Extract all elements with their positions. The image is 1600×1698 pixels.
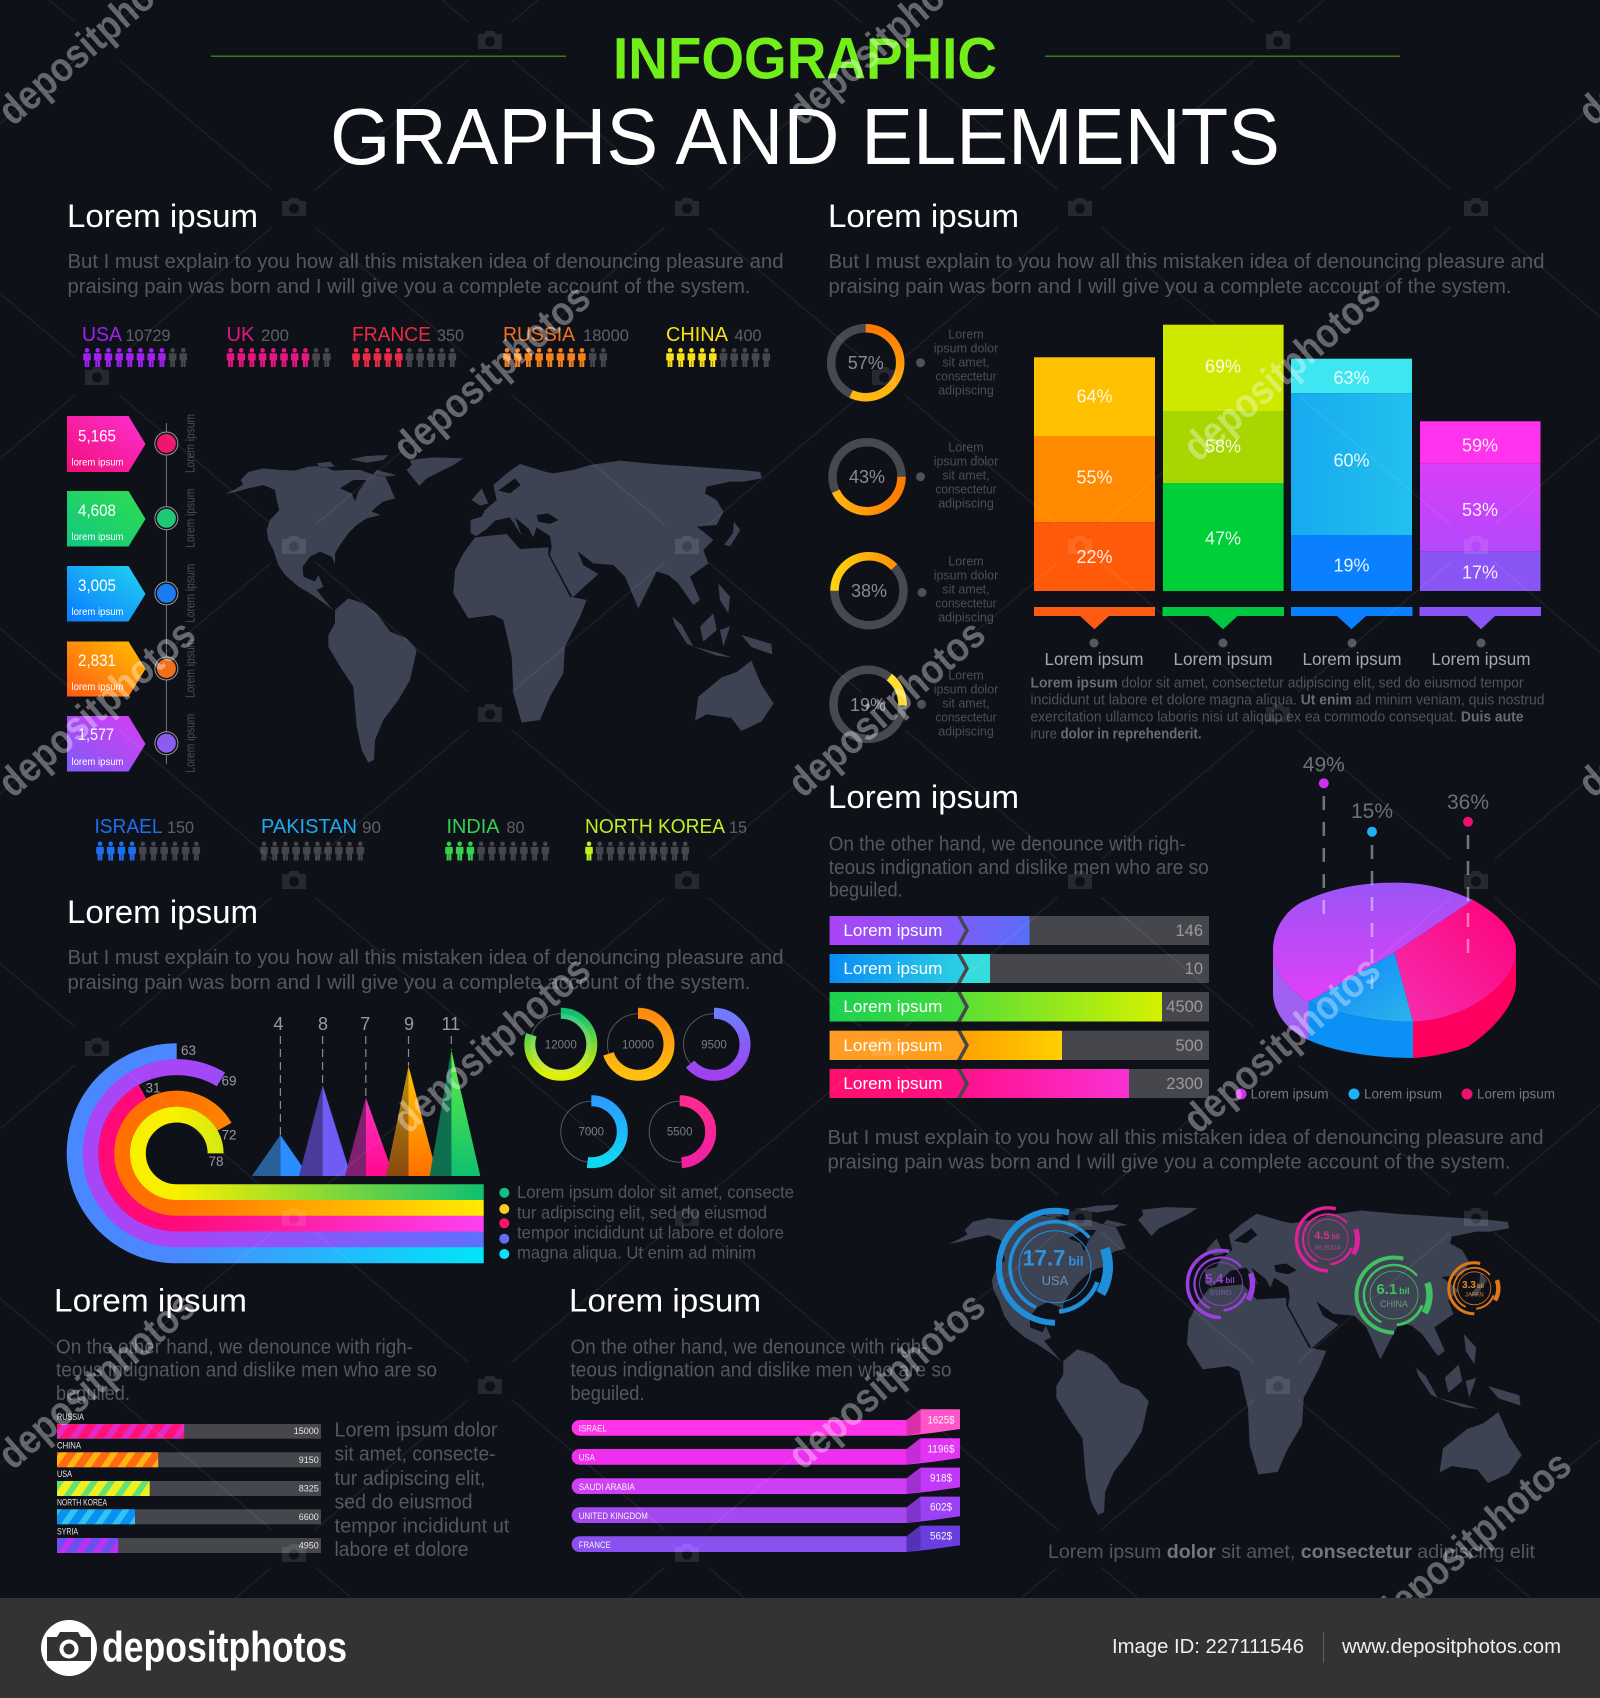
bar: 10: 10	[1185, 960, 1203, 978]
donut text 1: adipiscing	[938, 383, 994, 397]
striped bar: North Korea	[57, 1498, 321, 1524]
tag: 4,608: lorem ipsum	[72, 531, 124, 543]
intro text: On the other hand, we denounce with righ-	[570, 1336, 928, 1358]
rainbow arc chart	[75, 1051, 484, 1255]
donut text 4: consectetur	[936, 710, 996, 724]
country: India	[445, 819, 550, 860]
country: USA: USA	[82, 323, 122, 346]
rainbow labels: 72	[221, 1127, 237, 1142]
footer logo wordmark: depositphotos	[102, 1624, 347, 1672]
ring: Japan 3.3 bil: JAPAN	[1465, 1292, 1484, 1298]
small donut: 12000	[530, 1013, 592, 1075]
triangle dashes and numbers: 11	[441, 1014, 460, 1034]
footer logo icon	[41, 1620, 97, 1676]
tag: 2,831	[67, 639, 198, 698]
ring: Europe 5,4 bil: EURO	[1210, 1288, 1232, 1297]
bar: 500: 500	[1175, 1037, 1203, 1055]
country: Russia: 18000	[583, 326, 629, 345]
title	[211, 26, 1400, 181]
country: China: 400	[734, 326, 762, 345]
pie legend: Lorem ipsum	[1364, 1086, 1442, 1102]
small donut: 10000: 10000	[622, 1039, 654, 1051]
triangle dashes and numbers: 4	[273, 1014, 283, 1034]
watermark cameras	[85, 31, 1488, 1562]
country: Israel	[96, 819, 200, 860]
heading: Lorem ipsum	[828, 779, 1019, 815]
donut: 57%	[831, 328, 925, 397]
stacked bar 3: Lorem ipsum	[1302, 649, 1402, 669]
intro text line 2: teous indignation and dislike men who are so	[570, 1360, 952, 1382]
ring: Russia 4.5 bil	[1290, 1201, 1366, 1277]
stacked bar 2: 58%	[1205, 437, 1241, 457]
striped bar: China	[57, 1441, 321, 1467]
donut text 1: sit amet,	[942, 355, 990, 369]
bar: 500	[830, 1031, 1209, 1060]
country: China	[666, 327, 770, 367]
intro text line 2: praising pain was born and I will give you a complete account of the system.	[68, 972, 750, 994]
intro text line 2: teous indignation and dislike men who are so	[829, 857, 1209, 879]
bar: 4500: Lorem ipsum	[843, 997, 942, 1016]
intro text line 3: beguiled.	[570, 1383, 644, 1405]
country: UK: 200	[261, 326, 289, 345]
tag: 2,831: lorem ipsum	[72, 681, 124, 693]
watermarks: depositphotos	[1174, 274, 1389, 470]
donut: 43%: 43%	[849, 467, 885, 487]
ribbon: USA: 1196$	[928, 1444, 954, 1456]
stacked bar 1: 55%	[1076, 468, 1112, 488]
donut text 3: adipiscing	[938, 611, 994, 625]
footer bar	[0, 1598, 1600, 1698]
country: North Korea	[585, 819, 746, 860]
donut text 3: Lorem	[948, 555, 984, 569]
map caption: Lorem ipsum dolor sit amet, consectetur adipiscing elit	[1048, 1541, 1536, 1563]
tag: 4,608: 4,608	[78, 501, 116, 520]
tag: 3,005: Lorem ipsum	[184, 564, 198, 623]
bar: 146: Lorem ipsum	[843, 921, 942, 940]
bars caption: irure dolor in reprehenderit.	[1030, 726, 1202, 742]
triangle dashes and numbers: 8	[318, 1014, 328, 1034]
rainbow labels: 31	[145, 1081, 161, 1096]
donut text 2	[934, 441, 998, 511]
ring: Europe 5,4 bil: 5,4bil	[1205, 1271, 1235, 1286]
bars caption: exercitation ullamco laboris nisi ut aliquip ex ea commodo consequat. Duis aute	[1030, 709, 1524, 725]
striped bar: Russia: RUSSIA	[57, 1412, 84, 1422]
triangle dashes and numbers: 9	[404, 1014, 414, 1034]
pie callout: 49%: 49%	[1303, 754, 1345, 777]
stacked bar 4: 53%	[1462, 500, 1498, 520]
ribbon: United Kingdom: 602$	[930, 1502, 952, 1514]
striped bar: Syria: 4950	[299, 1540, 319, 1550]
country: Pakistan	[260, 819, 380, 860]
intro text: On the other hand, we denounce with righ-	[56, 1336, 413, 1358]
country: Russia: RUSSIA	[503, 323, 575, 346]
small donut: 12000: 12000	[545, 1039, 577, 1051]
pie legend: Lorem ipsum	[1477, 1086, 1555, 1102]
3D pie chart	[1273, 883, 1516, 1058]
donut text 4: Lorem	[948, 668, 984, 682]
donut: 19%	[820, 656, 926, 753]
stacked bar 4: Lorem ipsum	[1432, 649, 1530, 669]
donut text 2: Lorem	[948, 441, 984, 455]
ribbon: United Kingdom: UNITED KINGDOM	[579, 1511, 648, 1521]
heading: Lorem ipsum	[54, 1282, 247, 1318]
small donut: 9500	[683, 1013, 745, 1075]
donut text 3	[934, 555, 998, 625]
rainbow legend: magna aliqua. Ut enim ad minim	[517, 1243, 756, 1263]
donut: 43%	[832, 442, 925, 511]
watermarks: depositphotos	[779, 1282, 994, 1478]
striped bars side text: Lorem ipsum dolor	[334, 1420, 498, 1442]
text below pie line 2: praising pain was born and I will give you a complete account of the system.	[828, 1152, 1510, 1174]
striped bar: USA	[57, 1469, 321, 1496]
bars caption: incididunt ut labore et dolore magna aliqua. Ut enim ad minim veniam, quis nostrud	[1030, 692, 1544, 708]
intro text line 3: beguiled.	[56, 1383, 130, 1405]
ring: Japan 3.3 bil	[1444, 1258, 1505, 1319]
country: UK: UK	[226, 323, 255, 346]
ribbon: Israel: 1625$	[928, 1414, 954, 1426]
ring: Japan 3.3 bil: 3.3bil	[1462, 1280, 1484, 1291]
country: USA: 10729	[126, 326, 170, 345]
striped bar: Syria: SYRIA	[57, 1526, 78, 1536]
stacked bar 1: Lorem ipsum	[1044, 649, 1144, 669]
donut text 3: consectetur	[936, 597, 996, 611]
tag: 3,005: 3,005	[78, 576, 116, 595]
stacked bar 4: 17%	[1462, 562, 1498, 582]
intro text line 2: praising pain was born and I will give you a complete account of the system.	[828, 276, 1512, 298]
bar: 2300: 2300	[1166, 1075, 1203, 1093]
ring: USA 17.7 bil: USA	[1042, 1273, 1069, 1288]
country: China: CHINA	[666, 323, 728, 346]
bar: 10: Lorem ipsum	[843, 959, 942, 978]
country: North Korea: NORTH KOREA	[585, 815, 725, 838]
title rule right	[1045, 56, 1400, 57]
donut text 4: adipiscing	[938, 724, 994, 738]
striped bars side text: tur adipiscing elit,	[334, 1468, 486, 1490]
ribbon: France	[572, 1526, 960, 1552]
donut text 2: ipsum dolor	[934, 455, 998, 469]
panel: world map statistics	[67, 198, 784, 862]
ribbon: Israel	[572, 1409, 960, 1436]
title rule left	[211, 56, 566, 57]
stacked bar 1	[1034, 357, 1155, 669]
tag: 1,577: Lorem ipsum	[184, 714, 198, 773]
striped bar: North Korea: NORTH KOREA	[57, 1498, 107, 1508]
pie callout: 49%	[1303, 754, 1345, 920]
pie legend	[1236, 1086, 1555, 1102]
country: India: 80	[506, 818, 524, 837]
intro text: On the other hand, we denounce with righ-	[829, 834, 1186, 856]
stacked bar 4: 59%	[1462, 436, 1498, 456]
world map: lower right panel	[948, 1205, 1522, 1515]
ring: USA 17.7 bil	[987, 1199, 1123, 1335]
donut: 38%	[834, 556, 926, 625]
bar: 10	[830, 954, 1209, 983]
ribbon: Israel: ISRAEL	[579, 1424, 607, 1434]
bars caption	[1030, 676, 1544, 742]
small donut: 5500	[649, 1101, 711, 1163]
small donut: 9500: 9500	[701, 1039, 727, 1051]
bar: 2300	[830, 1069, 1209, 1098]
timeline axis	[165, 423, 167, 764]
stacked bar 2: 47%	[1205, 528, 1241, 548]
panel: striped bars	[54, 1282, 510, 1561]
striped bars side text: sit amet, consecte-	[334, 1444, 496, 1466]
pie callout: 15%: 15%	[1351, 800, 1393, 823]
rainbow labels: 69	[221, 1074, 237, 1089]
stacked bar 2	[1162, 325, 1284, 669]
donut text 1: ipsum dolor	[934, 341, 998, 355]
rainbow labels: 78	[208, 1154, 224, 1169]
donut text 4: ipsum dolor	[934, 682, 998, 696]
ring: China 6.1 bil: 6.1bil	[1376, 1281, 1410, 1298]
watermarks: depositphotos	[779, 610, 994, 806]
stacked bar 3: 19%	[1334, 556, 1370, 576]
country: Pakistan: 90	[362, 818, 381, 837]
panel: rainbow arcs and triangles	[67, 894, 794, 1263]
country: France: FRANCE	[352, 323, 431, 346]
ribbon: France: FRANCE	[579, 1540, 611, 1550]
pie callout: 15%	[1351, 800, 1393, 998]
striped bars side text: labore et dolore	[334, 1539, 468, 1561]
watermarks: depositphotos	[384, 946, 599, 1142]
tag: 2,831: 2,831	[78, 651, 116, 670]
world map: left panel	[225, 455, 774, 763]
ring: Russia 4.5 bil: RUSSIA	[1315, 1245, 1341, 1252]
rainbow legend: tempor incididunt ut labore et dolore	[517, 1223, 784, 1243]
title line: GRAPHS AND ELEMENTS: GRAPHS AND ELEMENTS	[330, 92, 1280, 181]
bar: 4500: 4500	[1166, 998, 1203, 1016]
tag: 1,577: lorem ipsum	[72, 756, 124, 768]
tag: 4,608	[67, 489, 198, 548]
striped bars side text	[334, 1420, 510, 1561]
small donut: 10000	[607, 1013, 669, 1075]
intro text line 2: teous indignation and dislike men who are so	[56, 1360, 437, 1382]
tag: 5,165: 5,165	[78, 426, 116, 446]
donut text 1: Lorem	[948, 327, 984, 341]
donut text 3: sit amet,	[942, 583, 990, 597]
country: Israel: 150	[167, 818, 194, 837]
title line: INFOGRAPHIC: INFOGRAPHIC	[613, 26, 997, 92]
donut: 38%: 38%	[851, 581, 887, 601]
country: Israel: ISRAEL	[94, 815, 162, 838]
ribbon: Saudi Arabia: SAUDI ARABIA	[579, 1482, 635, 1492]
rainbow legend: tur adipiscing elit, sed do eiusmod	[517, 1203, 767, 1223]
triangle dashes and numbers: 7	[360, 1014, 370, 1034]
striped bars side text: sed do eiusmod	[334, 1491, 472, 1513]
ribbon: United Kingdom	[572, 1497, 960, 1523]
ring: Europe 5,4 bil	[1181, 1244, 1261, 1324]
heading: Lorem ipsum	[569, 1282, 761, 1318]
panel: horizontal bars and 3D pie	[828, 754, 1555, 1174]
watermarks: depositphotos	[1174, 946, 1389, 1142]
donut text 4: sit amet,	[942, 696, 990, 710]
tag: 3,005	[67, 564, 198, 623]
country: France	[352, 327, 464, 367]
intro text line 2: praising pain was born and I will give you a complete account of the system.	[68, 276, 750, 298]
tag: 5,165: lorem ipsum	[72, 456, 124, 468]
ribbon: Saudi Arabia	[572, 1468, 960, 1494]
image id: Image ID: 227111546	[1112, 1636, 1304, 1658]
bar: 146: 146	[1175, 922, 1203, 940]
donut text 2: sit amet,	[942, 469, 990, 483]
striped bar: USA: 8325	[299, 1484, 319, 1494]
country: North Korea: 15	[729, 818, 747, 837]
stacked bar 2: 69%	[1205, 357, 1241, 377]
rainbow labels: 63	[181, 1043, 196, 1058]
ribbon: USA	[572, 1438, 960, 1465]
country: UK	[226, 327, 331, 367]
watermarks: depositphotos	[384, 274, 599, 470]
striped bars side text: tempor incididunt ut	[334, 1516, 510, 1538]
ring: Russia 4.5 bil: 4.5 bil	[1314, 1230, 1340, 1242]
rainbow legend	[499, 1182, 794, 1263]
bar: 4500	[830, 992, 1209, 1022]
intro text line 3: beguiled.	[829, 880, 903, 902]
donut text 1: consectetur	[936, 369, 996, 383]
striped bar: China: 9150	[299, 1455, 319, 1465]
tag: 1,577: 1,577	[78, 725, 114, 744]
donut: 19%: 19%	[850, 695, 886, 715]
stacked bar 3	[1291, 359, 1412, 669]
triangle chart	[252, 1050, 480, 1176]
tag: 2,831: Lorem ipsum	[184, 639, 198, 698]
country: France: 350	[437, 326, 464, 345]
stacked bar 1: 64%	[1076, 387, 1112, 407]
text below pie: But I must explain to you how all this mistaken idea of denouncing pleasure and	[828, 1127, 1544, 1149]
tag: 1,577	[67, 714, 198, 773]
heading: Lorem ipsum	[828, 198, 1019, 234]
bars caption: Lorem ipsum dolor sit amet, consectetur adipiscing elit, sed do eiusmod tempor	[1030, 676, 1524, 692]
pie legend: Lorem ipsum	[1251, 1086, 1329, 1102]
ring: China 6.1 bil: CHINA	[1380, 1299, 1408, 1309]
stacked bar 3: 63%	[1334, 368, 1370, 388]
rainbow labels	[145, 1043, 237, 1169]
donut text 2: adipiscing	[938, 497, 994, 511]
country: Pakistan: PAKISTAN	[261, 815, 357, 838]
stacked bar 4	[1420, 421, 1541, 669]
rainbow legend: Lorem ipsum dolor sit amet, consecte	[517, 1182, 794, 1202]
ribbon: France: 562$	[930, 1530, 952, 1542]
stacked bar 1: 22%	[1076, 547, 1112, 567]
striped bar: Russia: 15000	[294, 1426, 319, 1436]
ring: China 6.1 bil	[1348, 1249, 1440, 1341]
intro text: But I must explain to you how all this mistaken idea of denouncing pleasure and	[68, 251, 784, 273]
intro text: But I must explain to you how all this mistaken idea of denouncing pleasure and	[68, 947, 784, 969]
striped bar: Russia	[57, 1412, 321, 1439]
donut text 1	[934, 327, 998, 397]
striped bar: China: CHINA	[57, 1441, 81, 1451]
striped bar: Syria	[57, 1526, 321, 1553]
tag: 5,165: Lorem ipsum	[184, 414, 198, 473]
website url: www.depositphotos.com	[1341, 1636, 1561, 1658]
striped bar: North Korea: 6600	[299, 1512, 319, 1522]
panel: stacked bars and donuts	[820, 198, 1544, 753]
tag: 3,005: lorem ipsum	[72, 606, 124, 618]
ribbon: Saudi Arabia: 918$	[930, 1472, 952, 1484]
pie callout: 36%: 36%	[1447, 791, 1489, 814]
small donut: 7000	[560, 1101, 622, 1163]
country: USA	[83, 327, 188, 367]
country: Russia	[503, 327, 628, 367]
panel: world map rings	[987, 1199, 1536, 1563]
small donut: 5500: 5500	[667, 1126, 692, 1138]
donut: 57%: 57%	[848, 353, 884, 373]
stacked bar 2: Lorem ipsum	[1174, 649, 1272, 669]
tag: 4,608: Lorem ipsum	[184, 489, 198, 548]
ribbon: USA: USA	[579, 1452, 595, 1462]
tag: 5,165	[67, 414, 198, 473]
bar: 146	[830, 916, 1209, 945]
stacked bar 3: 60%	[1334, 451, 1370, 471]
donut text 2: consectetur	[936, 483, 996, 497]
pie callout: 36%	[1447, 791, 1489, 957]
donut text 4	[934, 668, 998, 738]
ring: USA 17.7 bil: 17.7bil	[1022, 1246, 1084, 1271]
intro text: But I must explain to you how all this mistaken idea of denouncing pleasure and	[828, 251, 1544, 273]
bar: 500: Lorem ipsum	[843, 1036, 942, 1055]
country: India: INDIA	[446, 815, 500, 838]
striped bar: USA: USA	[57, 1469, 72, 1479]
footer divider	[1323, 1632, 1324, 1663]
panel: ribbon bars	[569, 1282, 960, 1552]
heading: Lorem ipsum	[67, 894, 258, 930]
donut text 3: ipsum dolor	[934, 569, 998, 583]
heading: Lorem ipsum	[67, 198, 258, 234]
small donut: 7000: 7000	[579, 1126, 604, 1138]
bar: 2300: Lorem ipsum	[843, 1074, 942, 1093]
triangle dashes and numbers	[273, 1014, 460, 1135]
